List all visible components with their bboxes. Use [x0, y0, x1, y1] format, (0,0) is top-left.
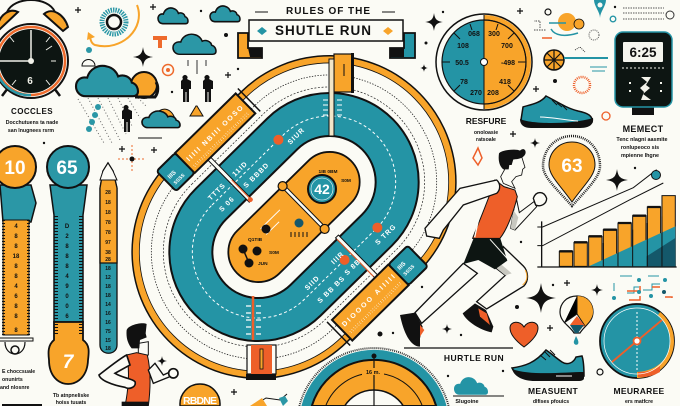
gauge: number 10: 4 — [14, 284, 18, 290]
far arm — [511, 197, 537, 230]
gauge dial: 108 — [457, 43, 469, 50]
gauge: number 10: 10 — [4, 158, 26, 179]
inner white band — [193, 117, 395, 317]
ground line and hurtle run — [404, 348, 513, 363]
near arm — [425, 180, 500, 238]
core circle 42: 42 — [314, 181, 330, 197]
thermometer pencil: 38 — [105, 250, 111, 256]
core marker dots: JUN — [258, 261, 268, 267]
gauge: number 65: 8 — [65, 264, 69, 270]
text: resfure — [466, 116, 507, 143]
molecule icon — [231, 389, 288, 406]
gauge: number 10: 4 — [14, 224, 18, 230]
thermometer pencil — [100, 163, 117, 353]
icon: circular arrow with dotted ring — [87, 5, 139, 46]
track: shuttle run oval: S 06 — [218, 196, 236, 214]
lower-right banner — [327, 244, 429, 345]
gauge dial: -498 — [501, 60, 515, 67]
text block lower left: onunirts — [2, 377, 23, 383]
thermometer pencil: 18 — [105, 284, 111, 290]
text block lower left — [0, 369, 89, 406]
orange core — [216, 140, 372, 294]
thermometer pencil: 18 — [105, 293, 111, 299]
gauge: number 10: 8 — [14, 314, 18, 320]
gauge: number 65: 65 — [56, 158, 78, 179]
thermometer pencil: 97 — [105, 240, 111, 246]
gauge dial: 208 — [487, 90, 499, 97]
gauge: number 10: 18 — [13, 254, 20, 260]
thermometer pencil: 28 — [105, 257, 111, 263]
track: shuttle run oval: TTTS — [207, 182, 227, 202]
shorts — [463, 237, 507, 269]
text: memect: mpienne lhgne — [621, 153, 659, 159]
device: stopwatch — [615, 32, 672, 115]
gauge: number 10: 6 — [14, 294, 18, 300]
thermometer pencil: 14 — [105, 302, 111, 308]
icon: alarm clock — [0, 0, 68, 98]
text block lower left: hoiss tuuats — [56, 400, 86, 406]
title text: RULES OF THE — [286, 6, 370, 17]
icon: dotted network — [612, 276, 672, 300]
small cloud with caption — [453, 377, 504, 405]
thermometer pencil: 16 — [105, 311, 111, 317]
lower-right banner: DIOOOO AIIIII — [341, 274, 397, 328]
device: stopwatch: 6:25 — [629, 45, 657, 60]
top right decorative icons — [420, 0, 674, 165]
icon: alarm clock: 6 — [27, 76, 33, 87]
icon: pie balloon — [560, 296, 593, 345]
text: measuent — [528, 386, 579, 405]
track: shuttle run oval: S 8B — [344, 258, 363, 277]
gauge dial: 270 — [470, 90, 482, 97]
gauge: number 10: 8 — [14, 264, 18, 270]
thermometer pencil: 18 — [105, 346, 111, 352]
gauge: number 65: 0 — [65, 294, 69, 300]
gauge dial: 300 — [488, 31, 500, 38]
torso — [473, 180, 517, 238]
text: meuraree: ers matfcre — [625, 399, 653, 405]
thermometer pencil: 18 — [105, 266, 111, 272]
text: measuent: MEASUENT — [528, 386, 579, 396]
semicircle dial bottom: 16 m. — [366, 370, 380, 376]
thermometer pencil: 18 — [105, 210, 111, 216]
thermometer pencil: 12 — [105, 275, 111, 281]
text: memect: Tenc nlagni aasmite — [616, 137, 668, 143]
thermometer pencil: 15 — [105, 338, 111, 344]
icon: location pin 63 — [543, 136, 600, 206]
teal lane — [132, 56, 456, 378]
gauge: number 65: 8 — [65, 244, 69, 250]
icon: rain clouds and people — [76, 6, 240, 143]
text block lower left: Tb atnpneliske — [53, 393, 89, 399]
icon: location pin 63: 63 — [561, 156, 583, 177]
core circle 42 — [308, 169, 351, 203]
icon: heart — [510, 322, 538, 347]
gauge: number 65: 8 — [65, 254, 69, 260]
text block lower left: E choccsuale — [2, 369, 35, 375]
gauge dial: 700 — [501, 43, 513, 50]
core marker dots — [238, 218, 307, 268]
lower-right banner: ::::::::::::::::::::::::::: — [348, 281, 403, 335]
gauge: number 65: 2 — [65, 234, 69, 240]
core circle 42: S0M — [341, 178, 351, 184]
title ribbon: SHUTLE RUN — [275, 23, 371, 38]
text: meuraree: MEURAREE — [613, 386, 665, 396]
gauge dial: 78 — [460, 79, 468, 86]
front leg — [477, 247, 528, 309]
track: shuttle run oval: IIIR — [330, 251, 346, 266]
text: coccles: Docchutuens ta nade — [6, 120, 58, 126]
core circle 42: 1IB 0BM — [319, 169, 337, 175]
small cloud with caption: Slugoine — [455, 399, 479, 405]
text: resfure: onoloasie — [474, 130, 498, 136]
gauge: number 10: 8 — [14, 304, 18, 310]
gauge dial — [436, 14, 532, 110]
text: resfure: RESFURE — [466, 116, 507, 126]
text: memect: MEMECT — [623, 124, 664, 134]
thermometer pencil: 78 — [105, 230, 111, 236]
track: shuttle run oval: 11ID — [231, 160, 249, 178]
upper-left banner: IIIS — [167, 170, 178, 181]
gauge: number 10: 8 — [14, 244, 18, 250]
gauge dial: 50.5 — [455, 60, 469, 67]
text block lower left: and nlosnre — [0, 385, 30, 391]
track: shuttle run oval: SIUR — [287, 127, 307, 146]
gauge: number 65: 7 — [63, 352, 75, 373]
gauge: number 65 — [47, 146, 89, 384]
trend node and star — [606, 167, 660, 191]
text: meuraree — [613, 386, 665, 405]
text: memect: ronlupeoco sis — [621, 145, 659, 151]
badge: rbdne — [180, 384, 220, 406]
track: shuttle run oval — [76, 0, 512, 406]
ground line and hurtle run: HURTLE RUN — [444, 353, 504, 363]
gauge dial: 418 — [499, 79, 511, 86]
gauge: number 10: 8 — [14, 274, 18, 280]
outer orange ring — [79, 2, 509, 406]
track: shuttle run oval: S BB BS — [317, 275, 347, 305]
gauge: number 65: D — [65, 224, 70, 230]
top gate — [323, 53, 354, 136]
gauge dial: 068 — [468, 31, 480, 38]
upper-left banner: IIIII NBIII OOSO — [186, 104, 245, 163]
text: memect — [616, 124, 668, 159]
icon: teal shoe — [520, 96, 593, 128]
bar chart — [537, 170, 677, 267]
compass dial — [600, 304, 674, 378]
text: coccles: COCCLES — [11, 107, 53, 116]
text: coccles: san lnugnees rsrm — [8, 128, 54, 134]
cross lines — [206, 156, 252, 202]
red markers and lane labels — [271, 133, 285, 147]
gauge: number 65: 6 — [65, 314, 69, 320]
text: measuent: dlfises pfouics — [533, 399, 569, 405]
lower-right banner: IIIS — [397, 261, 407, 272]
text: coccles — [6, 107, 58, 134]
thermometer pencil: 75 — [105, 329, 111, 335]
track: shuttle run oval: SIID — [304, 275, 321, 292]
thermometer pencil: 16 — [105, 320, 111, 326]
core marker dots: S0M — [269, 250, 279, 256]
semicircle dial bottom — [299, 348, 449, 406]
lower right stars and dots — [157, 241, 603, 377]
thermometer pencil: 78 — [105, 220, 111, 226]
small runner — [99, 323, 178, 406]
upper-left banner — [155, 89, 260, 193]
thermometer pencil: 18 — [105, 200, 111, 206]
lower-right banner: SSSS — [402, 263, 417, 277]
thermometer pencil: 28 — [105, 190, 111, 196]
upper-left banner: ::::::::::::::::::::::::::::: — [192, 111, 251, 169]
gauge: number 10: 8 — [14, 328, 18, 334]
track: shuttle run oval: S BBBD — [243, 162, 271, 190]
big runner — [400, 149, 547, 347]
core marker dots: Q1TIB — [248, 237, 263, 243]
back leg — [415, 263, 477, 323]
icon: teal shoe lower — [512, 350, 584, 381]
gauge: number 65: 0 — [65, 304, 69, 310]
gauge: number 65: 9 — [65, 284, 69, 290]
title ribbon — [238, 6, 415, 58]
head — [501, 157, 525, 188]
track: shuttle run oval: S TRG — [374, 223, 398, 247]
upper-left banner: SSSS — [173, 172, 187, 186]
gauge: number 10: 8 — [14, 234, 18, 240]
text: resfure: ratsoale — [476, 137, 496, 143]
gauge: number 65: 4 — [65, 274, 69, 280]
bottom gate — [246, 296, 276, 380]
small decorative icons left — [43, 4, 239, 172]
gauge: number 10 — [0, 146, 36, 354]
